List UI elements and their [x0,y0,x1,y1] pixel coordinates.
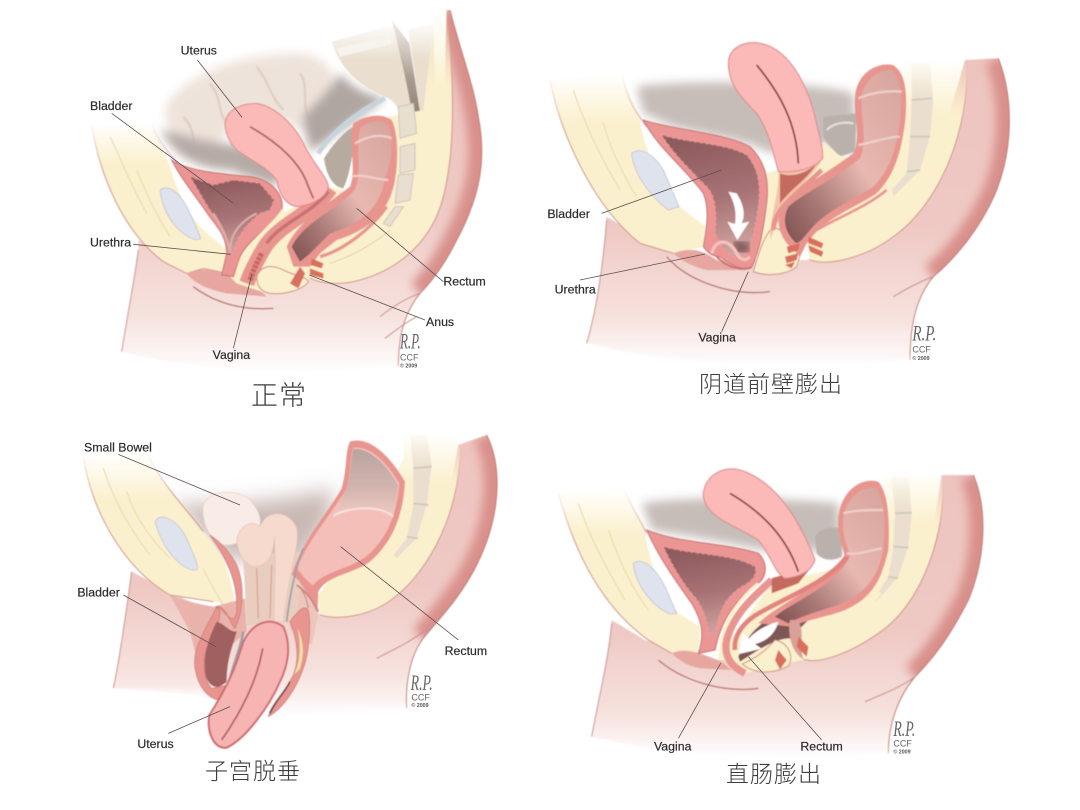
illustration: normal pelvis [92,10,482,382]
leader lines [678,657,822,740]
signature: R.P. [399,328,421,353]
panel: anterior vaginal wall prolapse [547,43,1009,376]
signature: © 2009 [400,362,417,369]
label: Uterus: Uterus [137,737,174,751]
signature [410,670,433,709]
illustration: rectocele [558,469,983,767]
label: Anus: Anus [426,315,454,329]
label: Small Bowel: Small Bowel [84,441,152,455]
panel: uterine prolapse [77,432,497,751]
signature: R.P. [912,321,936,346]
signature [893,716,915,755]
signature: CCF [912,345,931,355]
signature: R.P. [893,716,915,741]
panel: rectocele [558,469,983,767]
signature: CCF [411,692,430,702]
label: Urethra: Urethra [555,282,596,296]
label: Bladder: Bladder [77,586,120,600]
label: Rectum: Rectum [800,740,843,754]
signature: © 2009 [411,702,429,709]
leader lines [580,170,748,332]
caption: rectal bulge: 直肠膨出 [726,761,822,787]
signature [399,328,421,369]
label: Vagina: Vagina [213,348,250,362]
leader lines [118,454,458,733]
label: Urethra: Urethra [90,236,131,250]
label: Rectum: Rectum [443,275,486,289]
signature: R.P. [410,670,433,695]
label: Bladder: Bladder [547,207,590,221]
caption: anterior vaginal wall bulge: 阴道前壁膨出 [699,371,843,397]
signature: © 2009 [893,748,911,755]
label: Uterus: Uterus [181,43,217,57]
label: Vagina: Vagina [654,740,692,754]
leader lines [112,60,443,348]
panel: normal anatomy [90,10,486,382]
signature: © 2009 [912,355,930,362]
caption: normal: 正常 [251,381,307,411]
signature: CCF [400,353,419,363]
signature [912,321,936,362]
signature: CCF [893,739,912,749]
label: Vagina: Vagina [698,330,736,344]
illustration: uterine prolapse [83,432,497,748]
caption: uterine prolapse: 子宫脱垂 [205,758,301,784]
illustration: cystocele [550,43,1009,376]
label: Bladder: Bladder [90,99,132,113]
label: Rectum: Rectum [445,644,487,658]
